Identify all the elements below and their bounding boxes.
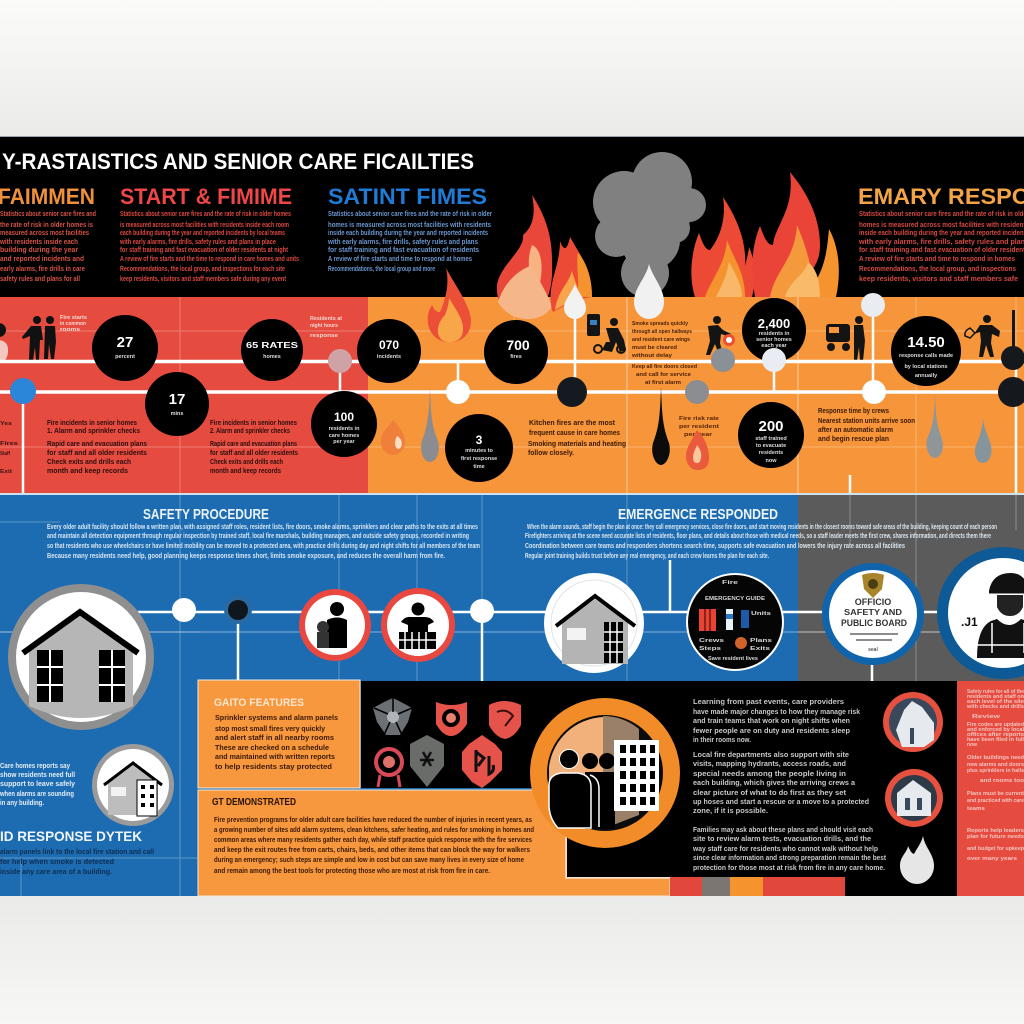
text block: paragraph one: have made major changes to how they manage risk bbox=[693, 709, 860, 716]
stat circle 3: first response bbox=[461, 456, 497, 462]
text block: paragraph two: zone, if it is possible. bbox=[693, 808, 768, 815]
text block: paragraph two: Local fire departments also support with site bbox=[693, 752, 849, 759]
icon: dark badge with data: Units bbox=[751, 611, 771, 617]
stat circle 2400 bbox=[742, 298, 806, 362]
text block: red lower left: Fire incidents in senior homes bbox=[47, 420, 137, 427]
icon: flame centre bbox=[691, 197, 755, 297]
stat circle 27: percent bbox=[115, 354, 135, 360]
text: orange note 3: Nearest station units arrive soon bbox=[818, 418, 915, 425]
stat circle 2400: senior homes bbox=[756, 337, 792, 343]
label: small white note bbox=[60, 315, 342, 339]
node: gray marker B bbox=[685, 380, 709, 404]
panel: red side block: over many years bbox=[967, 856, 1017, 862]
text block: red lower middle: for staff and all older residents bbox=[210, 450, 298, 457]
text block: far left: Fires bbox=[0, 441, 18, 447]
panel: red timeline band bbox=[0, 297, 368, 493]
text: orange note 2: follow closely. bbox=[528, 450, 574, 457]
label: small white note: response bbox=[310, 333, 338, 339]
stat circle 700 bbox=[484, 320, 548, 384]
text: orange note 3 bbox=[818, 408, 915, 443]
icon: firefighter bbox=[706, 316, 735, 355]
column: orange heading and text: measured across most facilities bbox=[0, 230, 89, 237]
panel: header band bbox=[0, 137, 1024, 297]
icon: large house bbox=[8, 584, 154, 730]
column: primary response heading and text bbox=[858, 184, 1024, 283]
column: blue heading and text: for staff training and fast evacuation of residents bbox=[328, 247, 479, 254]
panel: red side block: plan for future needs bbox=[967, 834, 1024, 840]
node: white dot bbox=[172, 598, 196, 622]
panel: red side block: Plans must be current bbox=[967, 791, 1024, 797]
icon: firefighter portrait bbox=[937, 547, 1024, 679]
icon: building photo 1 bbox=[883, 692, 943, 752]
text block: red lower middle bbox=[210, 420, 298, 475]
icon: shield seal bbox=[822, 563, 924, 665]
text block: demonstrated: Fire prevention programs for older adult care facilities have reduced the number of injuries in recent years, as bbox=[214, 817, 532, 824]
text: orange note 2: Smoking materials and heating bbox=[528, 441, 626, 448]
stat circle 1450: by local stations bbox=[904, 364, 948, 370]
text block: small house caption: support to leave safely bbox=[0, 781, 75, 788]
stat circle 100: per year bbox=[333, 439, 356, 445]
panel: black info block bbox=[361, 681, 957, 896]
text: orange note 4: Fire risk rate bbox=[679, 416, 719, 422]
text block: paragraph three: site to review alarm tests, evacuation drills, and the bbox=[693, 836, 871, 843]
text block: paragraph one: in their rooms now. bbox=[693, 737, 751, 744]
text block: red lower left: Rapid care and evacuation plans bbox=[47, 441, 147, 448]
text block: safety procedure: so that residents who use wheelchairs or have limited mobility can be moved to a protected area, with practice drills during day and night shifts for all members of the team bbox=[47, 543, 480, 550]
icon: red shield bbox=[462, 735, 502, 788]
text block: emergence responded bbox=[525, 524, 997, 560]
text block: rapid response system: inside any care area of a building. bbox=[0, 869, 112, 876]
stat circle 070 bbox=[357, 319, 421, 383]
column: red heading and text: Recommendations, the local group, and inspections for each site bbox=[120, 266, 285, 273]
text block: demonstrated: and remain among the best tools for protecting those who are most at risk from fire in care. bbox=[214, 868, 490, 875]
label: small white note: night hours bbox=[310, 323, 338, 329]
node: white dot right bbox=[470, 599, 494, 623]
heading: emergence responded: EMERGENCE RESPONDED bbox=[618, 506, 778, 523]
icon: dark badge with data: Exits bbox=[750, 646, 770, 652]
icon: residents with building in orange ring bbox=[530, 698, 680, 848]
text block: paragraph one: fewer people are on duty and residents sleep bbox=[693, 728, 850, 735]
text block: features: and maintained with written reports bbox=[215, 754, 335, 761]
column: orange heading and text: the rate of risk in older homes is bbox=[0, 222, 93, 229]
stat circle 3: minutes to bbox=[465, 448, 494, 454]
icon: resident at desk in ring bbox=[381, 588, 455, 662]
panel: red side block: and enforced by local bbox=[967, 727, 1024, 733]
text block: red lower middle: 2. Alarm and sprinkler checks bbox=[210, 428, 290, 435]
stat circle 3: time bbox=[473, 464, 485, 470]
icon: shield seal: PUBLIC BOARD bbox=[841, 618, 907, 628]
text: orange note 1: at first alarm bbox=[645, 380, 681, 386]
column: orange heading and text: building during the year bbox=[0, 247, 78, 254]
icon: smoke cloud bbox=[593, 152, 706, 297]
stat circle 1450: 14.50 bbox=[907, 334, 945, 351]
text block: paragraph three: protection for those most at risk from fire in any care home. bbox=[693, 865, 885, 872]
column: red heading and text: A review of fire starts and the time to respond in care homes and units bbox=[120, 256, 299, 263]
text block: red lower middle: Check exits and drills each bbox=[210, 459, 283, 466]
label: small white note: in common bbox=[60, 321, 87, 327]
text block: paragraph three: way staff care for residents who cannot walk without help bbox=[692, 846, 878, 853]
stat circle 17: 17 bbox=[169, 391, 185, 408]
stat circle 3: 3 bbox=[476, 433, 483, 447]
icon: responder with hose bbox=[587, 314, 626, 353]
text block: red lower middle: Fire incidents in senior homes bbox=[210, 420, 297, 427]
stat circle 200 bbox=[738, 402, 804, 468]
stat circle 3 bbox=[445, 414, 513, 482]
text block: paragraph two: special needs among the people living in bbox=[693, 771, 846, 778]
text: orange note 4 bbox=[679, 416, 719, 438]
icon: resident in ring bbox=[299, 589, 371, 661]
icon: dark badge with data: EMERGENCY GUIDE bbox=[705, 596, 765, 602]
panel: orange demonstrated box bbox=[198, 790, 670, 896]
text block: paragraph two: up hoses and start a rescue or a move to a protected bbox=[693, 799, 869, 806]
heading: features: GAITO FEATURES bbox=[214, 697, 304, 709]
text: orange note 1: and resident care wings bbox=[632, 337, 690, 343]
column: blue heading and text bbox=[327, 184, 492, 273]
stat circle 1450: annually bbox=[915, 373, 938, 379]
text: orange note 1: Keep all fire doors closed bbox=[632, 364, 697, 370]
panel: red side block: Review bbox=[972, 714, 1001, 720]
column: orange heading and text: Statistics about senior care fires and bbox=[0, 211, 96, 218]
text block: red lower left bbox=[47, 420, 147, 475]
icon: gray shield bbox=[410, 735, 444, 787]
column: orange heading and text bbox=[0, 184, 96, 283]
text block: paragraph one: and train teams that work on night shifts when bbox=[693, 718, 850, 725]
column: orange heading and text: and reported incidents and bbox=[0, 256, 84, 263]
stat circle 1450 bbox=[891, 316, 961, 386]
node: pink marker bbox=[328, 349, 352, 373]
panel: red side block: offices after reports bbox=[967, 732, 1024, 738]
text: orange note 3: and begin rescue plan bbox=[818, 436, 889, 443]
icon: flame right bbox=[752, 172, 839, 297]
stat circle 200: staff trained bbox=[755, 436, 787, 442]
text block: safety procedure: and maintain all detection equipment through regular inspection by trained staff, local fire marshals, building managers, and outside safety groups, recorded in writing bbox=[47, 533, 469, 540]
icon: building photo 2 bbox=[885, 769, 943, 827]
icon: dark badge with data: Fire bbox=[722, 580, 738, 586]
text block: features: to help residents stay protected bbox=[215, 764, 332, 771]
flames and smoke bbox=[428, 152, 839, 342]
icon: shield seal: OFFICIO bbox=[855, 597, 891, 607]
text block: red lower left: 1. Alarm and sprinkler checks bbox=[47, 428, 140, 435]
text block: far left: Exit bbox=[0, 469, 12, 475]
text: orange note 1: without delay bbox=[631, 353, 673, 359]
text block: demonstrated: common areas where many residents gather each day, while staff practice quick response with the fire services bbox=[214, 837, 532, 844]
icon: shield seal: SAFETY AND bbox=[844, 608, 902, 617]
text block: features: Sprinkler systems and alarm panels bbox=[215, 715, 338, 722]
column: red heading and text: each building during the year and reported incidents by local teams bbox=[120, 230, 285, 237]
grid lines gray bbox=[798, 495, 1024, 681]
node: white marker top bbox=[861, 293, 885, 317]
text block: paragraph two: visits, mapping hydrants, access roads, and bbox=[693, 761, 846, 768]
text block: features: and alert staff in all nearby rooms bbox=[215, 735, 334, 742]
panel: red side block: Reports help leaders bbox=[967, 828, 1024, 834]
stat circle 700: fires bbox=[510, 354, 522, 360]
stat circle 100: care homes bbox=[329, 433, 359, 439]
panel: red side block: each level of the site bbox=[967, 699, 1024, 705]
icon: two residents bbox=[0, 316, 56, 361]
node: blue marker bbox=[10, 378, 36, 404]
text: orange note 3: after an automatic alarm bbox=[818, 427, 893, 434]
text: orange note 1: Smoke spreads quickly bbox=[632, 321, 689, 327]
column: red heading and text: for staff training and fast evacuation of older residents at night bbox=[120, 247, 289, 254]
panel: orange features box bbox=[198, 680, 360, 788]
stat circle 100: 100 bbox=[334, 410, 354, 424]
text block: features bbox=[215, 715, 338, 771]
text block: red lower middle: month and keep records bbox=[210, 468, 281, 475]
node: dark markers right bbox=[998, 310, 1024, 407]
column: primary response heading and text: EMARY RESPO bbox=[858, 184, 1024, 209]
column: red heading and text: keep residents, visitors and staff members safe during any event bbox=[120, 276, 287, 283]
panel: red side block: residents and staff on bbox=[967, 694, 1024, 700]
stat circle 27 bbox=[92, 315, 158, 381]
text block: far left: Yes bbox=[0, 421, 12, 427]
column: red heading and text bbox=[119, 184, 299, 283]
text block: features: These are checked on a schedule bbox=[215, 745, 329, 752]
text block: paragraph one bbox=[693, 699, 860, 744]
text block: small house caption bbox=[0, 763, 75, 807]
column: blue heading and text: A review of fire starts and time to respond at homes bbox=[328, 256, 472, 263]
text block: emergence responded: Coordination between care teams and responders shortens search time, supports safe evacuation and lowers the injury rate across all facilities bbox=[525, 543, 905, 550]
text: orange note 2: Kitchen fires are the most bbox=[529, 420, 616, 427]
text block: paragraph two: each building, which gives the arriving crews a bbox=[693, 780, 855, 787]
column: orange heading and text: early alarms, fire drills in care bbox=[0, 266, 85, 273]
icon: pink badge bbox=[376, 749, 402, 787]
text block: small house caption: Care homes reports say bbox=[0, 763, 70, 770]
icon: gray badge bbox=[373, 698, 412, 735]
icon: dark badge with data bbox=[686, 573, 784, 671]
node: gray marker A bbox=[711, 348, 735, 372]
icon: white flame bbox=[900, 836, 934, 884]
text block: red lower left: for staff and all older residents bbox=[47, 450, 147, 457]
timelines bbox=[0, 293, 1024, 760]
icon: red badge 2 bbox=[489, 701, 521, 739]
column: blue heading and text: SATINT FIMES bbox=[328, 184, 487, 209]
column: blue heading and text: inside each building during the year and reported incidents bbox=[328, 230, 488, 237]
panel: gray response block bbox=[798, 495, 1024, 681]
label: small white note: Fire starts bbox=[60, 315, 87, 321]
text block: small house caption: show residents need full bbox=[0, 772, 75, 779]
text: orange note 1: through all open hallways bbox=[632, 329, 692, 335]
text block: emergence responded: Regular joint training builds trust before any real emergency, and each crew learns the plan for each site. bbox=[525, 553, 769, 560]
heading: safety procedure: SAFETY PROCEDURE bbox=[143, 506, 269, 523]
panel: red side block bbox=[957, 681, 1024, 896]
panel: blue section bbox=[0, 493, 1024, 896]
heading: rapid response system: ID RESPONSE DYTEK bbox=[0, 828, 142, 844]
panel: red side block: Older buildings need bbox=[967, 755, 1024, 761]
stat circle 200: now bbox=[766, 458, 777, 464]
text block: far left: Staff bbox=[0, 451, 10, 457]
text block: rapid response system bbox=[0, 849, 154, 876]
stat circle 070: 070 bbox=[379, 338, 399, 352]
column: red heading and text: is measured across most facilities with residents inside each room bbox=[120, 222, 289, 229]
text block: demonstrated: a growing number of sites add alarm systems, clean kitchens, safer heating, and rules for smoking in homes and bbox=[214, 827, 534, 834]
icon: dark badge with data: Crews bbox=[699, 638, 724, 644]
text block: red lower left: month and keep records bbox=[47, 468, 128, 475]
text block: red lower middle: Rapid care and evacuation plans bbox=[210, 441, 297, 448]
text block: paragraph three bbox=[692, 827, 887, 872]
label: small white note: rooms bbox=[60, 327, 80, 333]
text block: features: stop most small fires very quickly bbox=[215, 726, 325, 733]
text: orange note 1: must be cleared bbox=[632, 345, 677, 351]
stat circle 17: mins bbox=[171, 411, 183, 417]
stat circle rates: 65 RATES bbox=[246, 341, 299, 350]
panel: red side block: now bbox=[967, 742, 978, 748]
text block: rapid response system: alarm panels link to the local fire station and call bbox=[0, 849, 154, 856]
text: orange note 1: and call for service bbox=[636, 372, 691, 378]
icon: responder bbox=[965, 315, 1000, 357]
icon: dark badge with data: Save resident lives bbox=[708, 656, 758, 662]
node: white marker lower bbox=[862, 380, 886, 404]
text block: small house caption: when alarms are sounding bbox=[0, 791, 74, 798]
stat circle 27: 27 bbox=[117, 334, 133, 351]
icon: red badge 1 bbox=[436, 702, 467, 736]
text block: demonstrated: and keep the exit routes free from carts, chairs, beds, and other items that can block the way for walkers bbox=[214, 847, 530, 854]
node: white marker over stat bbox=[762, 348, 786, 372]
stat circle 1450: response calls made bbox=[899, 353, 953, 359]
text block: safety procedure: Every older adult facility should follow a written plan, with assigned staff roles, resident lists, fire doors, smoke alarms, sprinklers and clear paths to the exits at all times bbox=[47, 524, 478, 531]
stat circle rates: homes bbox=[263, 354, 281, 360]
text block: rapid response system: for help when smoke is detected bbox=[0, 859, 114, 866]
panel: red side block: with checks and drills bbox=[966, 704, 1024, 710]
text block: paragraph three: since clear information and strong preparation remain the best bbox=[693, 855, 887, 862]
stat circle 200: 200 bbox=[758, 418, 784, 435]
text block: safety procedure: Because many residents need help, good planning keeps response times short, limits smoke exposure, and reduces the overall harm from fire. bbox=[47, 553, 445, 560]
text block: far left bbox=[0, 421, 18, 475]
column: primary response heading and text: keep residents, visitors and staff members safe bbox=[859, 276, 1018, 283]
icon: large flame left bbox=[497, 195, 592, 319]
column: red heading and text: with early alarms, fire drills, safety rules and plans in place bbox=[119, 239, 276, 246]
label: small white note: Residents at bbox=[310, 316, 342, 322]
stat circle 17 bbox=[145, 372, 209, 436]
node: dark marker bbox=[557, 377, 587, 407]
stat circle 2400: 2,400 bbox=[758, 316, 790, 331]
stat circle 700: 700 bbox=[506, 337, 530, 353]
text block: small house caption: in any building. bbox=[0, 800, 44, 807]
text block: paragraph three: Families may ask about these plans and should visit each bbox=[693, 827, 873, 834]
column: orange heading and text: with residents inside each bbox=[0, 239, 78, 246]
icon: house in white circle bbox=[544, 573, 644, 673]
text: orange note 2: frequent cause in care homes bbox=[529, 430, 620, 437]
text block: demonstrated: during an emergency; such steps are simple and low in cost but can save many lives in every size of home bbox=[214, 857, 524, 864]
icon: shield seal: seal bbox=[868, 647, 878, 653]
panel: red side block: teams bbox=[967, 806, 985, 812]
text block: demonstrated bbox=[214, 817, 534, 875]
stat circle 070: incidents bbox=[377, 354, 401, 360]
icon: dark badge with data: Steps bbox=[699, 646, 721, 652]
panel: red side block: and rooms too bbox=[980, 778, 1024, 784]
heading: demonstrated: GT DEMONSTRATED bbox=[212, 797, 296, 808]
text block: paragraph two bbox=[693, 752, 869, 815]
stat circle 2400: residents in bbox=[759, 331, 790, 337]
text: orange note 1 bbox=[631, 321, 697, 386]
text block: safety procedure bbox=[47, 524, 480, 560]
icon: firefighter portrait: .J1 bbox=[961, 615, 978, 629]
icon: small flame bbox=[428, 268, 471, 342]
text block: red lower left: Check exits and drills each bbox=[47, 459, 131, 466]
panel: orange timeline band bbox=[368, 297, 1024, 493]
stat circle 200: residents bbox=[759, 450, 783, 456]
icon: teardrop markers bbox=[215, 264, 991, 597]
panel: red side block: have been filed in full bbox=[967, 737, 1024, 743]
text: orange note 4: per resident bbox=[679, 424, 719, 430]
column: blue heading and text: Statistics about senior care fires and the rate of risk in older bbox=[328, 211, 492, 218]
text: orange note 3: Response time by crews bbox=[818, 408, 889, 415]
column: blue heading and text: homes is measured across most facilities with residents bbox=[328, 222, 491, 229]
text block: paragraph two: clear picture of what to do first as they set bbox=[693, 790, 847, 797]
text: orange note 4: per year bbox=[684, 432, 713, 438]
column: blue heading and text: with early alarms, fire drills, safety rules and plans bbox=[327, 239, 478, 246]
column: primary response heading and text: with early alarms, fire drills, safety rules and plans bbox=[858, 239, 1024, 246]
icon: small house bbox=[92, 744, 174, 826]
node: dark dot bbox=[224, 596, 252, 624]
icon: dark badge with data: Plans bbox=[750, 638, 772, 644]
title: Y-RASTAISTICS AND SENIOR CARE FICAILTIES bbox=[2, 149, 474, 174]
text: orange note 2 bbox=[528, 420, 626, 457]
column: orange heading and text: FAIMMEN bbox=[0, 184, 95, 209]
panel: red side block: new alarms and doors bbox=[967, 762, 1024, 768]
colour strip bbox=[670, 877, 845, 896]
stat circle 200: to evacuate bbox=[756, 443, 786, 449]
stat circle 100 bbox=[311, 391, 377, 457]
text block: paragraph one: Learning from past events, care providers bbox=[693, 699, 844, 706]
column: red heading and text: Statistics about senior care fires and the rate of risk in older homes bbox=[120, 211, 291, 218]
stat circle 2400: each year bbox=[761, 343, 788, 349]
stat circle rates bbox=[241, 319, 303, 381]
column: red heading and text: START & FIMIME bbox=[120, 184, 292, 209]
stat circle 100: residents in bbox=[329, 426, 360, 432]
icon: crew and engine bbox=[826, 316, 865, 361]
column: orange heading and text: safety rules and plans for all bbox=[0, 276, 80, 283]
node: white marker bbox=[446, 380, 470, 404]
column: blue heading and text: Recommendations, the local group and more bbox=[328, 266, 435, 273]
